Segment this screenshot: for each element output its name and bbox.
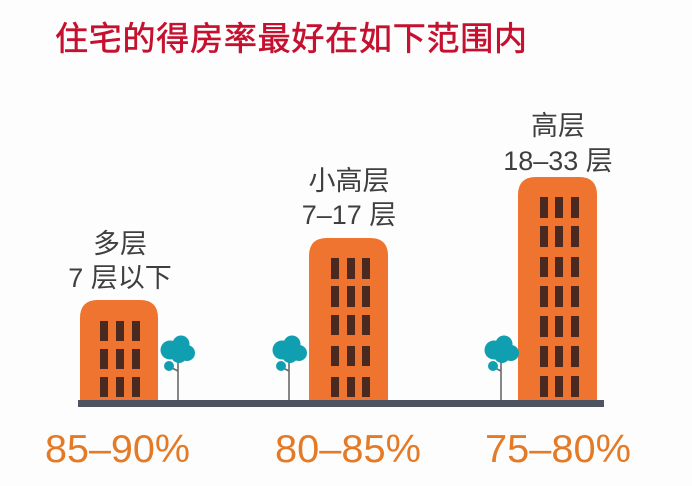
building: low-rise: [80, 300, 158, 401]
icon: tree 3: [484, 336, 519, 401]
icon: tree 2: [272, 336, 307, 401]
title: 住宅的得房率最好在如下范围内: [55, 20, 527, 57]
percentage: high-rise: 75–80%: [485, 428, 631, 471]
label: high-rise: [503, 111, 613, 176]
ground line: [78, 400, 604, 407]
percentage: low-rise: 85–90%: [45, 428, 190, 471]
label: low-rise: 7 层以下: [68, 263, 172, 293]
label: high-rise: 18–33 层: [503, 146, 613, 176]
label: low-rise: [68, 229, 172, 293]
building: high-rise: [518, 177, 597, 401]
label: high-rise: 高层: [531, 111, 585, 141]
percentage: small high-rise: 80–85%: [275, 428, 421, 471]
icon: tree 1: [160, 336, 195, 401]
label: small high-rise: [302, 166, 396, 230]
building: small high-rise: [309, 238, 388, 401]
label: small high-rise: 7–17 层: [302, 200, 396, 230]
label: low-rise: 多层: [93, 229, 147, 259]
label: small high-rise: 小高层: [308, 166, 390, 196]
